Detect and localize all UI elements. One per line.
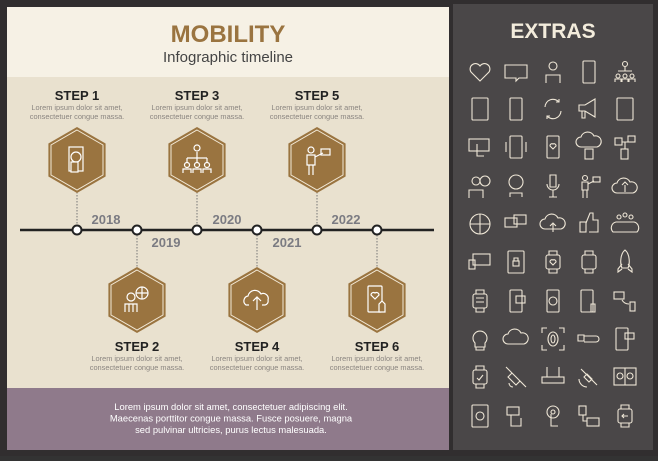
year labels: 2020 — [213, 212, 241, 227]
icon: step1 touch screen — [48, 127, 106, 193]
step labels: STEP 2 — [115, 339, 159, 354]
timeline dots — [72, 226, 382, 234]
icon: step6 phone heart — [348, 267, 406, 333]
icon: step3 hierarchy — [168, 127, 226, 193]
year labels: 2018 — [92, 212, 120, 227]
step labels — [55, 88, 399, 354]
year labels: 2022 — [332, 212, 360, 227]
step descriptions — [30, 103, 424, 372]
step descriptions: consectetuer congue massa. — [90, 363, 184, 372]
step labels: STEP 4 — [235, 339, 280, 354]
footer: Maecenas porttitor congue massa. Fusce posuere, magna — [110, 412, 353, 424]
icon: step5 presenter — [288, 127, 346, 193]
header band — [7, 7, 449, 77]
subtitle: Infographic timeline — [163, 49, 293, 66]
step labels: STEP 1 — [55, 88, 99, 103]
footer: sed pulvinar ultricies, purus lectus malesuada. — [135, 424, 327, 435]
title: MOBILITY — [171, 21, 285, 48]
icon: step4 cloud upload — [228, 267, 286, 333]
step labels: STEP 3 — [175, 88, 219, 103]
step descriptions: Lorem ipsum dolor sit amet, — [91, 354, 183, 363]
footer — [7, 388, 449, 450]
icon: step2 person globe — [108, 267, 166, 333]
panel: timeline — [7, 7, 449, 450]
step labels: STEP 6 — [355, 339, 399, 354]
icon grid — [469, 61, 639, 427]
step labels: STEP 5 — [295, 88, 339, 103]
step descriptions: consectetuer congue massa. — [270, 112, 364, 121]
step descriptions: consectetuer congue massa. — [210, 363, 304, 372]
step descriptions: consectetuer congue massa. — [330, 363, 424, 372]
timeline line — [20, 229, 434, 231]
step descriptions: consectetuer congue massa. — [150, 112, 244, 121]
step descriptions: consectetuer congue massa. — [30, 112, 124, 121]
step descriptions: Lorem ipsum dolor sit amet, — [331, 354, 423, 363]
year labels: 2021 — [273, 235, 301, 250]
year labels: 2019 — [152, 235, 180, 250]
panel: extras — [453, 4, 653, 450]
step descriptions: Lorem ipsum dolor sit amet, — [271, 103, 363, 112]
step descriptions: Lorem ipsum dolor sit amet, — [31, 103, 123, 112]
year labels — [92, 212, 360, 250]
step descriptions: Lorem ipsum dolor sit amet, — [211, 354, 303, 363]
step descriptions: Lorem ipsum dolor sit amet, — [151, 103, 243, 112]
footer: Lorem ipsum dolor sit amet, consectetuer adipiscing elit. — [114, 401, 348, 412]
extras title: EXTRAS — [510, 20, 596, 43]
